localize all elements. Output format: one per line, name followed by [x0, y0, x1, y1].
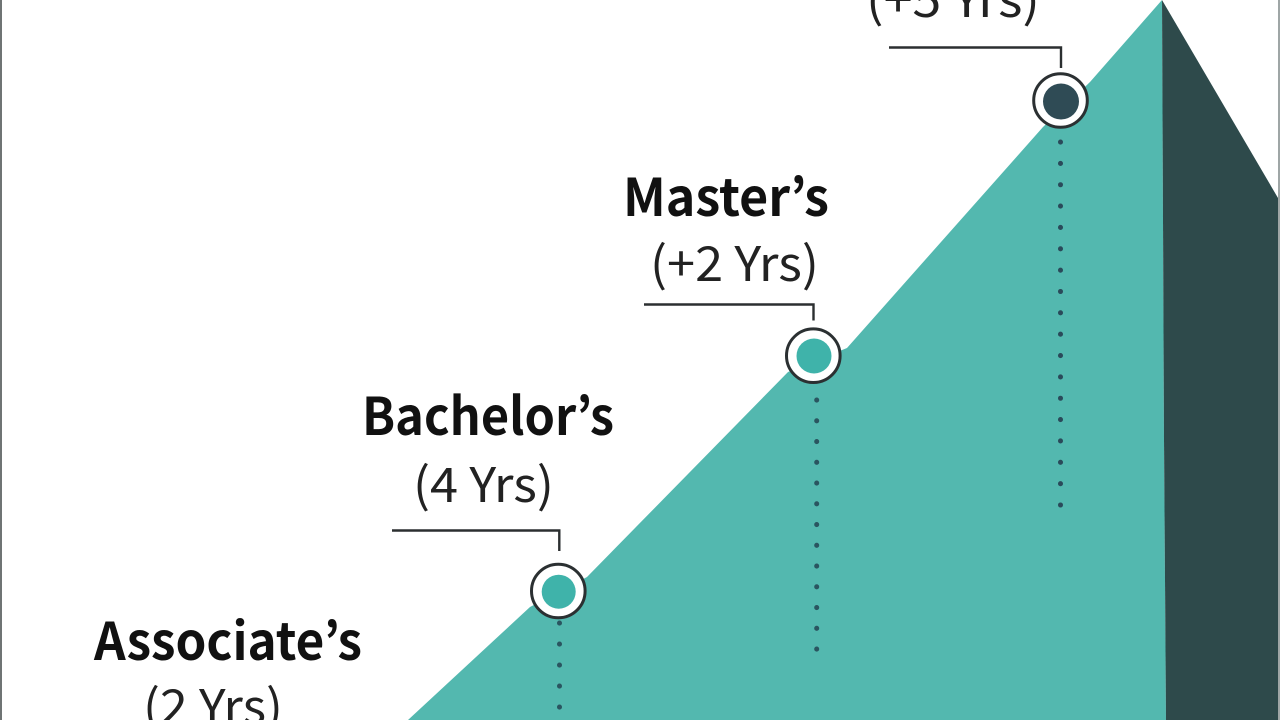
leader line [392, 530, 559, 551]
marker [1034, 74, 1087, 127]
label: plus 2 years: (+2 Yrs) [650, 225, 819, 295]
marker [532, 564, 585, 618]
label: 4 years: (4 Yrs) [413, 446, 554, 516]
milestone: Master's [623, 156, 840, 651]
slope: dark side face [1162, 0, 1278, 720]
milestone: Doctorate [866, 0, 1087, 506]
dotted drop line [814, 400, 819, 651]
leader line [644, 304, 814, 320]
slope: teal front face [408, 0, 1166, 720]
label: Master's degree: Master’s [623, 156, 829, 231]
milestone: Bachelor's [362, 375, 614, 720]
leader line [889, 48, 1061, 68]
label: Associate's degree: Associate’s [93, 600, 362, 675]
dotted drop line [557, 623, 562, 720]
label: Bachelor's degree: Bachelor’s [362, 375, 614, 450]
milestone: Associate's [93, 600, 362, 720]
dotted drop line [1058, 142, 1063, 506]
marker [786, 329, 840, 383]
